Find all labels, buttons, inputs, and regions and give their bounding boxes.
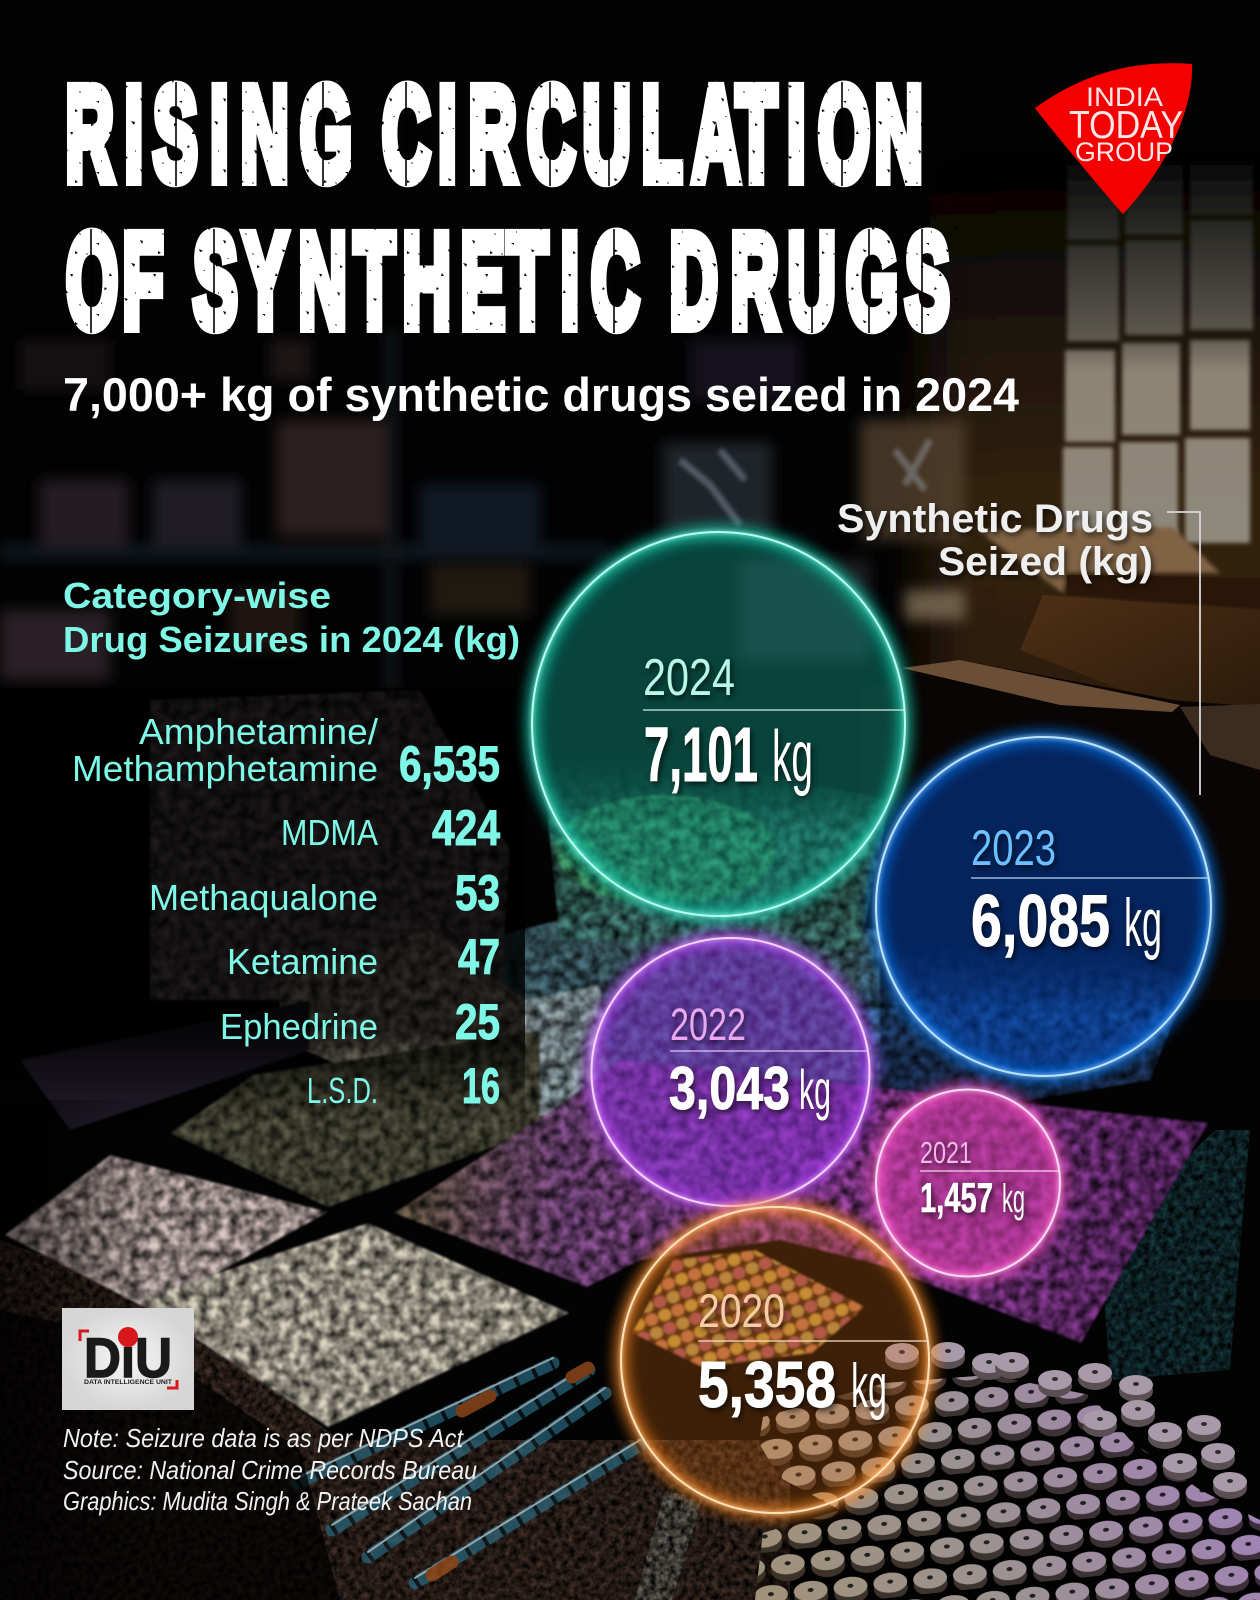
bubble: 2022 [592, 938, 870, 1206]
green pill heap [555, 795, 775, 905]
wooden floor [0, 1240, 790, 1600]
category-wise seizure list [72, 711, 500, 1114]
bubble: 2024 [532, 532, 905, 916]
category heading: Category-wise [63, 575, 331, 616]
subtitle: 7,000+ kg of synthetic drugs seized in 2024 [63, 368, 1019, 421]
row: Amphetamine/Methamphetamine [72, 711, 500, 792]
cardboard box flaps [977, 527, 1220, 593]
row: Methaqualone [149, 865, 500, 921]
bubble: 2021: 2021 [920, 1135, 972, 1170]
bubble: 2024: 7,101 [644, 712, 758, 798]
row: MDMA: MDMA [281, 812, 378, 853]
purple crinkled bag [394, 1060, 1208, 1343]
herb bag [170, 1030, 540, 1207]
row: Amphetamine/Methamphetamine: 6,535 [399, 736, 500, 792]
warehouse window panes [1063, 165, 1253, 543]
cream bag behind list bottom [280, 930, 525, 1090]
dark panel behind category list [0, 688, 525, 1118]
bubble: 2021: kg [1002, 1177, 1025, 1221]
row: MDMA [281, 800, 500, 856]
row: L.S.D.: 16 [462, 1058, 500, 1114]
row: Methaqualone: Methaqualone [149, 877, 378, 918]
pill colour tint [755, 1375, 1260, 1600]
logo: DIU Data Intelligence Unit: DiU [84, 1326, 172, 1389]
teal floor boards at right [1100, 1130, 1250, 1380]
vertical syringe [635, 1490, 702, 1600]
bubble: 2022: 2022 [670, 999, 746, 1050]
logo: India Today Group: INDIA [1086, 82, 1163, 112]
logo: India Today Group: GROUP [1075, 137, 1173, 167]
title [60, 60, 960, 356]
bubble: 2023: kg [1124, 885, 1162, 961]
row: Ketamine: Ketamine [227, 941, 378, 982]
row: Amphetamine/Methamphetamine: Methamphetamine [72, 748, 378, 789]
logo: India Today Group [1035, 63, 1192, 214]
note and source text: Note: Seizure data is as per NDPS Act [63, 1423, 465, 1453]
bubble: 2022: kg [799, 1058, 831, 1121]
syringe barrels [297, 1363, 640, 1583]
bubble: 2022: 3,043 [669, 1055, 790, 1122]
syringe highlights [297, 1358, 640, 1578]
pill pile [755, 1375, 1260, 1600]
bubble: 2020: kg [851, 1352, 887, 1421]
cardboard dark strip [1067, 575, 1260, 608]
shelf packages [0, 330, 965, 690]
circles heading: Synthetic Drugs Seized [837, 497, 1153, 584]
cardboard box front [1020, 595, 1260, 710]
row: L.S.D.: L.S.D. [307, 1070, 378, 1111]
logo: India Today Group: TODAY [1069, 104, 1183, 147]
lower box shadow [860, 660, 1260, 1000]
note and source text [63, 1423, 477, 1516]
category heading [63, 575, 520, 660]
blue bag texture [860, 925, 1190, 1105]
bubble: 2020: 2020 [698, 1284, 785, 1337]
digital scale [20, 1000, 310, 1130]
bubble: 2023 [876, 737, 1211, 1076]
syringes [297, 1358, 640, 1583]
bubble: 2023: 6,085 [971, 881, 1110, 962]
bubble: 2024: kg [772, 717, 813, 797]
circles heading: Synthetic Drugs Seized: Seized (kg) [938, 540, 1153, 584]
row: Ketamine: 47 [458, 929, 500, 985]
syringe markings [297, 1363, 640, 1583]
teal crinkled bag under heap [540, 740, 890, 950]
title: OF SYNTHETIC DRUGS [66, 207, 950, 356]
bracket leader line [1167, 512, 1200, 795]
logo: DIU Data Intelligence Unit [62, 1308, 194, 1410]
bubble: 2024: 2024 [643, 649, 735, 707]
row: Ketamine [227, 929, 500, 985]
bright crinkled bag beside list [525, 985, 610, 1120]
row: Ephedrine: Ephedrine [220, 1006, 378, 1047]
row: Ephedrine: 25 [455, 994, 500, 1050]
left edge fade [0, 1100, 150, 1600]
bubble: 2021 [876, 1090, 1060, 1276]
orange needle caps [432, 1368, 588, 1575]
note and source text: Source: National Crime Records Bureau [63, 1455, 477, 1485]
teal bags behind circles [400, 900, 880, 1110]
wall glow around window [930, 150, 1260, 790]
row: MDMA: 424 [432, 800, 500, 856]
cream pill bag [138, 1223, 569, 1427]
white pill bag left [5, 1155, 328, 1310]
white glitter on shelf package [680, 440, 930, 525]
row: Methaqualone: 53 [455, 865, 500, 921]
row: Ephedrine [220, 994, 500, 1050]
scattered pills [885, 1342, 1247, 1499]
lower left darkness [0, 1310, 340, 1600]
bubble: 2023: 2023 [971, 820, 1056, 876]
logo: DIU Data Intelligence Unit: DATA INTELLIGENCE UNIT [84, 1379, 172, 1386]
bubble: 2020: 5,358 [698, 1348, 836, 1421]
category heading: Drug Seizures in 2024 (kg) [63, 619, 520, 660]
row: L.S.D. [307, 1058, 500, 1114]
coloured candy pills [632, 1250, 865, 1367]
note and source text: Graphics: Mudita Singh & Prateek Sachan [63, 1486, 472, 1516]
circles heading: Synthetic Drugs Seized: Synthetic Drugs [837, 497, 1153, 541]
title: RISING CIRCULATION [66, 60, 923, 209]
lower box flap [902, 660, 1180, 712]
bubble: 2021: 1,457 [920, 1174, 993, 1221]
dim bag behind list [150, 690, 510, 1000]
row: Amphetamine/Methamphetamine: Amphetamine/ [139, 711, 378, 752]
bubble: 2020 [621, 1207, 929, 1513]
lower box right panel [1180, 704, 1260, 770]
